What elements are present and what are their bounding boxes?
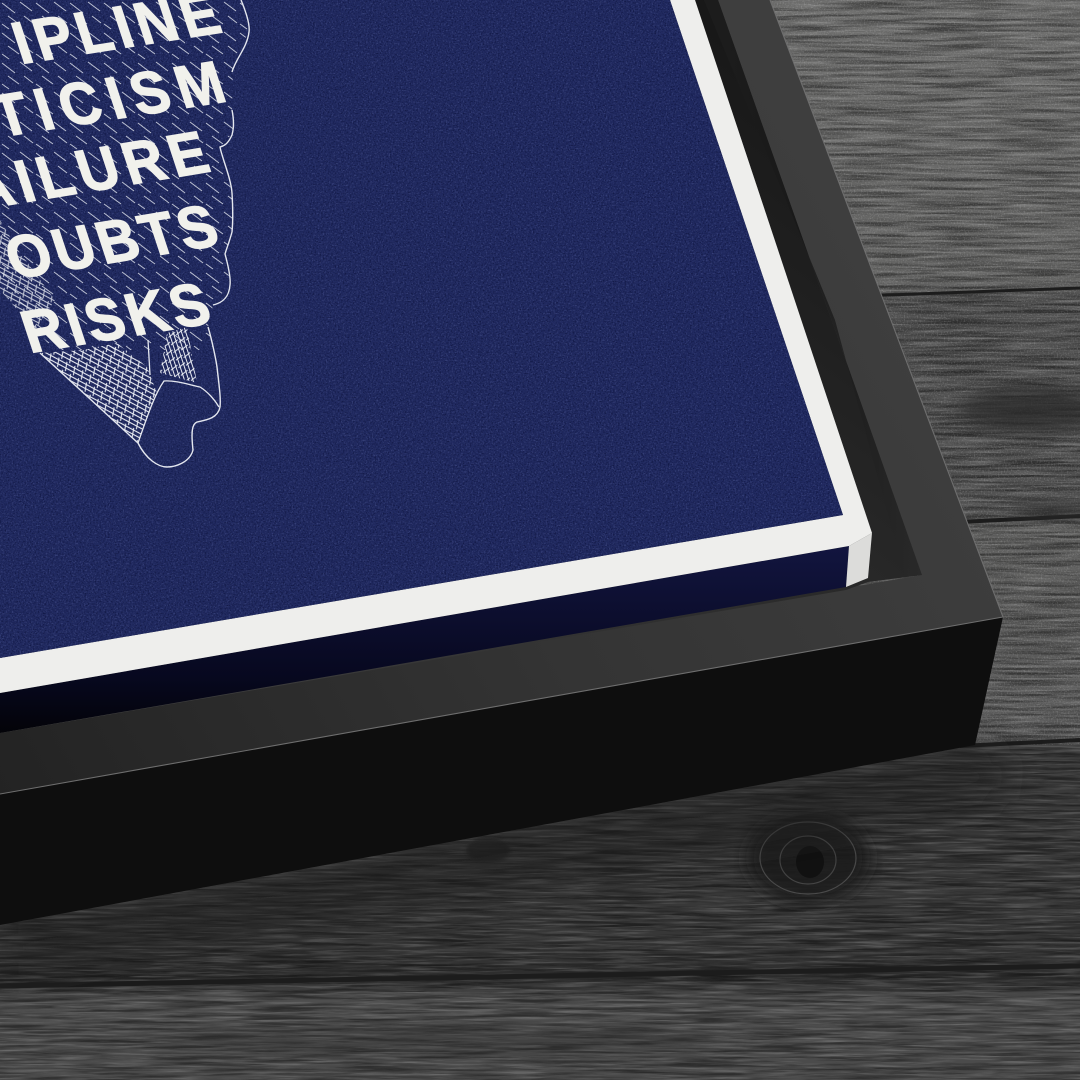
jaw line [138,340,219,443]
canvas words [0,0,233,366]
dense hatching: neck [40,343,157,443]
word: RISKS: RISKS [13,271,219,366]
canvas: side white corner [846,533,872,587]
canvas: navy print surface [0,0,850,660]
canvas: white wrap border [0,0,872,693]
gap between canvas and frame [0,0,922,733]
plank seams [0,288,1080,986]
frame: top face [0,0,1003,794]
frame highlight edge [0,0,1003,794]
illustration: head profile with hatching [0,0,250,467]
wood knot [466,812,870,904]
profile outline [40,0,249,467]
word: OUBTS: OUBTS [0,193,226,292]
sparse hatching [0,0,250,350]
dense hatching: cheek [0,220,55,330]
frame: floor shadow [0,745,1010,980]
dense hatching: collar [160,327,197,383]
canvas: side navy [0,546,849,733]
frame: dark outer side [0,617,1003,925]
dark wood patches [960,386,1080,434]
